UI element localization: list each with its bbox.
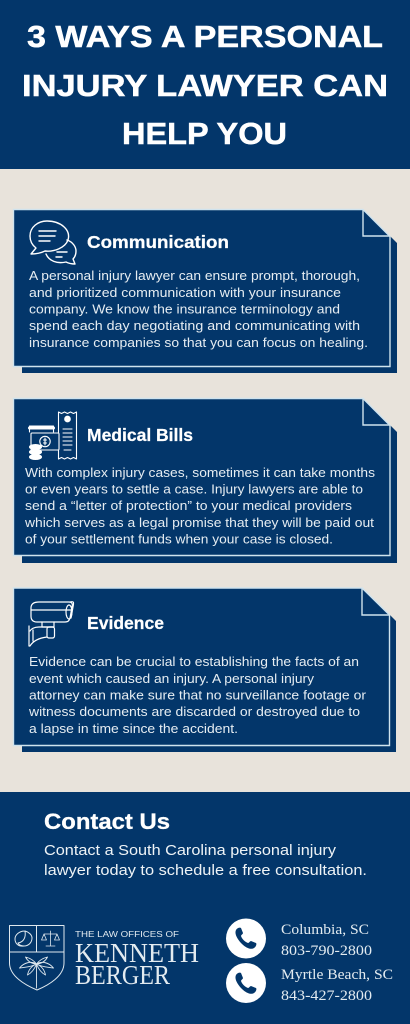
- heading: Communication: [87, 232, 229, 252]
- header banner with title: 3 WAYS A PERSONAL: [27, 19, 383, 54]
- body text: event which caused an injury. A personal injury: [29, 671, 314, 686]
- heading: Medical Bills: [87, 425, 193, 445]
- body text: [28, 654, 367, 736]
- body text: a lapse in time since the accident.: [29, 721, 238, 736]
- panel: evidence: [14, 588, 396, 752]
- body text: which serves as a legal promise that they will be paid out: [24, 515, 374, 530]
- header banner with title: INJURY LAWYER CAN: [22, 68, 388, 103]
- office: Myrtle Beach: [281, 967, 393, 1004]
- logo: firm name: THE LAW OFFICES OF: [75, 929, 179, 939]
- logo: firm name: [75, 929, 199, 990]
- panel: medical bills: [14, 398, 397, 563]
- body text: [24, 465, 375, 546]
- office: Columbia: [281, 922, 372, 959]
- contact text: [44, 843, 367, 879]
- header banner with title: HELP YOU: [122, 116, 287, 151]
- body text: spend each day negotiating and communicating with: [29, 318, 360, 333]
- body text: send a “letter of protection” to your medical providers: [25, 498, 352, 513]
- contact heading: Contact Us: [44, 809, 170, 834]
- icon: bills and money: [30, 412, 76, 460]
- body text: A personal injury lawyer can ensure prompt, thorough,: [29, 268, 360, 283]
- office: Myrtle Beach: Myrtle Beach, SC: [281, 967, 393, 983]
- contact text: Contact a South Carolina personal injury: [44, 843, 337, 859]
- logo: firm name: BERGER: [75, 960, 170, 990]
- body text: of your settlement funds when your case is closed.: [25, 532, 333, 546]
- body text: company. We know the insurance terminology and: [29, 302, 340, 316]
- body text: With complex injury cases, sometimes it can take months: [25, 465, 375, 480]
- body text: attorney can make sure that no surveillance footage or: [29, 688, 367, 702]
- body text: witness documents are discarded or destroyed due to: [28, 704, 360, 719]
- icon: phone 2: [226, 963, 266, 1003]
- header banner with title: [0, 0, 410, 169]
- contact text: lawyer today to schedule a free consultation.: [44, 863, 367, 879]
- body text: and prioritized communication with your insurance: [29, 285, 341, 300]
- body text: [29, 268, 368, 350]
- office: Myrtle Beach: 843-427-2800: [281, 988, 372, 1004]
- heading: Evidence: [87, 613, 164, 633]
- icon: phone 1: [226, 918, 266, 958]
- logo: firm name: KENNETH: [75, 938, 199, 968]
- footer band: [0, 792, 410, 1024]
- icon: speech bubbles: [30, 221, 76, 264]
- office: Columbia: Columbia, SC: [281, 922, 369, 938]
- body text: insurance companies so that you can focus on healing.: [29, 335, 368, 350]
- body text: Evidence can be crucial to establishing the facts of an: [29, 654, 359, 669]
- icon: security camera: [29, 602, 74, 646]
- body text: or even years to settle a case. Injury lawyers are able to: [25, 482, 363, 496]
- office: Columbia: 803-790-2800: [281, 943, 372, 959]
- panel: communication: [14, 210, 397, 373]
- logo: crest: [10, 926, 64, 990]
